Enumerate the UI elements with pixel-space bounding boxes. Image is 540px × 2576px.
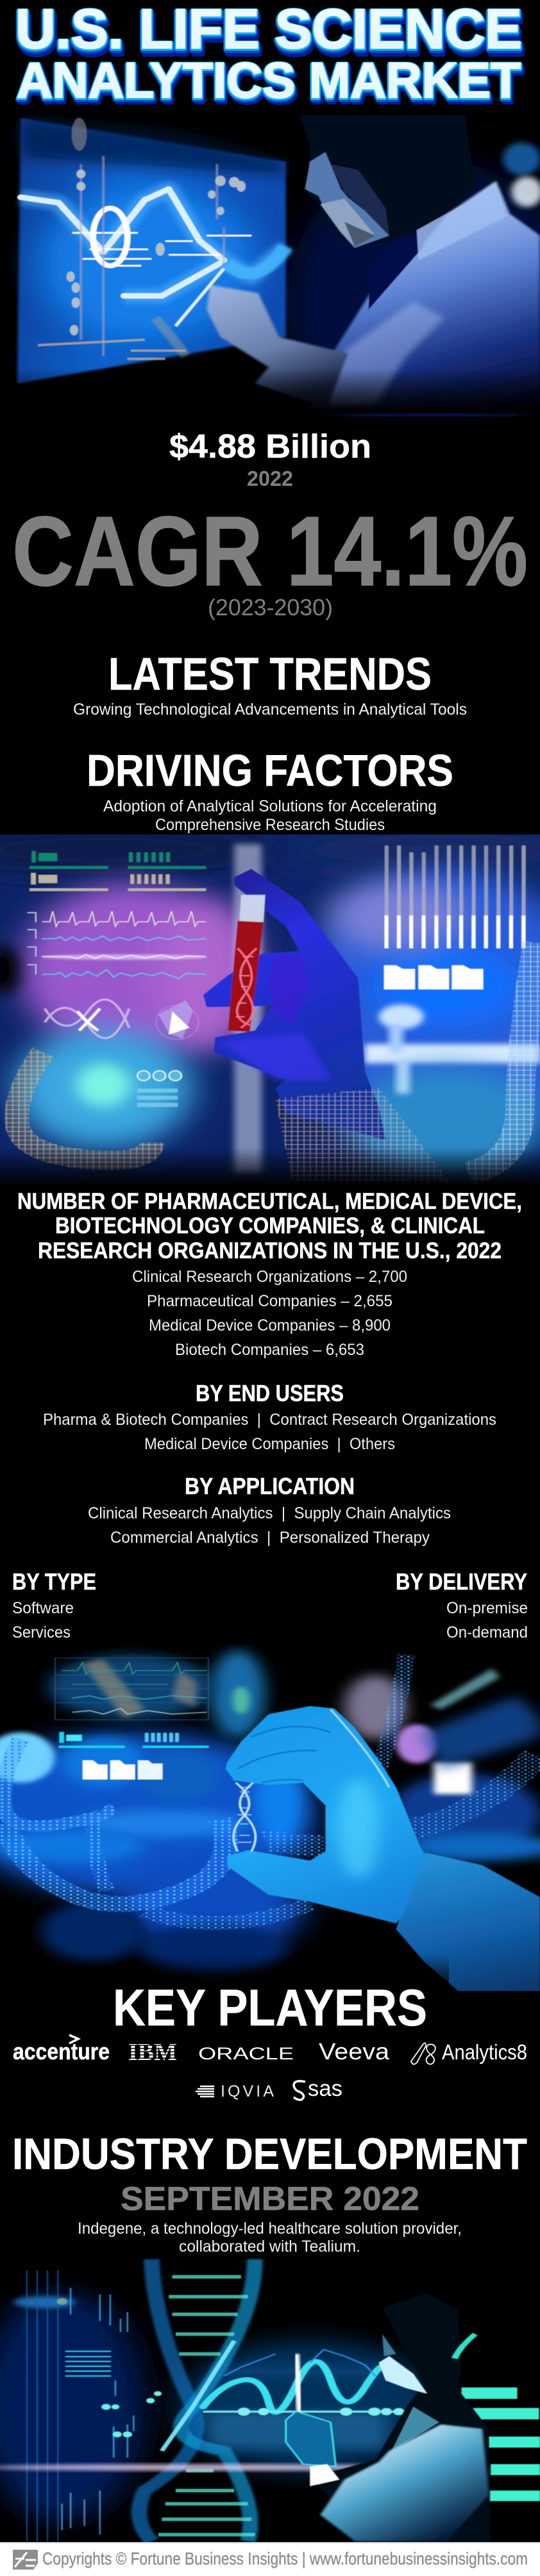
heading: number of companies: [17, 1189, 522, 1263]
heading: latest trends: LATEST TRENDS: [108, 649, 432, 700]
lab coat: [310, 181, 540, 408]
blurred laboratory backdrop: [0, 1650, 540, 1973]
logo: Analytics8: [411, 2040, 527, 2065]
segment: by type: Software: [12, 1599, 74, 1617]
wire mesh: [17, 943, 537, 1173]
vital signs bars and waveforms: [28, 851, 207, 979]
segment: by end users: [43, 1380, 496, 1453]
logo: SAS: sas: [308, 2076, 342, 2101]
segment: by end users: Medical Device Companies | Others: [144, 1435, 395, 1453]
footer: [0, 2542, 540, 2576]
development text: [78, 2220, 462, 2256]
scientist head: [300, 115, 475, 248]
market size year: 2022: [247, 467, 293, 490]
segment: by application: Clinical Research Analytics | Supply Chain Analytics: [88, 1504, 451, 1522]
light beam: [0, 2464, 427, 2470]
development date: SEPTEMBER 2022: [121, 2181, 419, 2218]
gloved hand: [203, 869, 385, 1140]
company counts: Clinical Research Organizations – 2,700: [132, 1268, 407, 1286]
driving factors text: Comprehensive Research Studies: [155, 816, 385, 834]
segment: by type: BY TYPE: [12, 1568, 96, 1595]
image: scientist with DNA helix: [0, 2259, 540, 2541]
image: gloved hand holding DNA strand: [0, 1650, 540, 1997]
scientist: [310, 2293, 491, 2541]
image fade: [0, 1147, 540, 1186]
backdrop glow: [0, 2292, 441, 2522]
left chart lines: [27, 2270, 162, 2541]
title: ANALYTICS MARKET: [17, 53, 521, 109]
logo: IQVIA: [196, 2082, 274, 2100]
sleeve: [396, 1852, 540, 1991]
segment: by application: [88, 1473, 451, 1547]
segment: by end users: Pharma & Biotech Companies | Contract Research Organizations: [43, 1411, 496, 1429]
logo: IBM: IBM: [128, 2039, 177, 2066]
bottom fade: [0, 369, 540, 413]
segment: by end users: BY END USERS: [196, 1380, 344, 1406]
percentage indicators: [58, 1732, 208, 1748]
company counts: Pharmaceutical Companies – 2,655: [147, 1292, 392, 1310]
company counts: Medical Device Companies – 8,900: [149, 1317, 391, 1334]
image backdrop: [0, 835, 540, 1183]
title: [15, 0, 524, 113]
latest trends text: Growing Technological Advancements in Analytical Tools: [73, 701, 467, 719]
logo: Veeva: Veeva: [319, 2038, 390, 2065]
segment: by application: BY APPLICATION: [185, 1473, 355, 1499]
image: gloved hand holding a test tube with DNA: [0, 835, 540, 1184]
title: ANALYTICS MARKET: [17, 54, 521, 110]
test tube: [228, 895, 265, 1032]
folders: [83, 1760, 162, 1779]
CAGR period: (2023-2030): [208, 594, 333, 620]
DNA helix: [139, 2259, 255, 2541]
title: U.S. LIFE SCIENCE: [15, 0, 522, 62]
heading: key players: KEY PLAYERS: [113, 1979, 427, 2037]
company counts: Biotech Companies – 6,653: [175, 1341, 364, 1359]
title: ANALYTICS MARKET: [19, 56, 523, 113]
segment: by type: [12, 1568, 96, 1641]
segment: by application: Commercial Analytics | Personalized Therapy: [110, 1529, 430, 1547]
forearm mesh: [276, 1088, 451, 1184]
segment: by delivery: On-premise: [446, 1599, 528, 1617]
monitor waveforms: [55, 1658, 208, 1720]
screen: [17, 118, 286, 383]
vertical bar chart: [385, 845, 525, 949]
logo: Oracle: ORACLE: [198, 2044, 294, 2063]
driving factors text: Adoption of Analytical Solutions for Accelerating: [103, 797, 437, 815]
glove: [226, 1706, 425, 1924]
heading: driving factors: DRIVING FACTORS: [87, 745, 453, 795]
title: U.S. LIFE SCIENCE: [15, 0, 522, 61]
company counts: [132, 1268, 407, 1359]
footer logo: [13, 2550, 38, 2570]
driving factors text: [103, 797, 437, 834]
folders: [384, 965, 483, 990]
dotted mesh: [3, 1654, 537, 1923]
gauge circles and bars: [137, 1071, 181, 1107]
heading: number of companies: BIOTECHNOLOGY COMPANIES, & CLINICAL: [55, 1213, 485, 1238]
title: ANALYTICS MARKET: [17, 52, 521, 108]
background lights: [503, 142, 540, 207]
holographic hands: [286, 2411, 336, 2466]
green data bars: [462, 2388, 540, 2501]
segment: by type: Services: [12, 1624, 71, 1641]
market size value: $4.88 Billion: [169, 428, 371, 465]
heading: number of companies: RESEARCH ORGANIZATIONS IN THE U.S., 2022: [38, 1238, 502, 1263]
logo: Analytics8: Analytics8: [442, 2040, 527, 2064]
bottom fade: [0, 1955, 449, 1997]
development text: collaborated with Tealium.: [179, 2238, 360, 2256]
logo: accenture: accenture: [13, 2038, 110, 2065]
segment: by delivery: On-demand: [446, 1624, 528, 1641]
development text: Indegene, a technology-led healthcare solution provider,: [78, 2220, 462, 2238]
hand with stylus: [176, 269, 348, 408]
logo: IQVIA: IQVIA: [221, 2082, 274, 2100]
key player logos: [13, 2035, 527, 2101]
segment: by delivery: [396, 1568, 528, 1641]
title: U.S. LIFE SCIENCE: [17, 4, 524, 66]
ambient room glow: [286, 159, 540, 444]
hero image: scientist at a holographic screen: [0, 115, 540, 444]
DNA strand and polygon graphic: [45, 999, 199, 1039]
DNA strand: [233, 1782, 255, 1851]
data wave: [203, 2350, 407, 2416]
